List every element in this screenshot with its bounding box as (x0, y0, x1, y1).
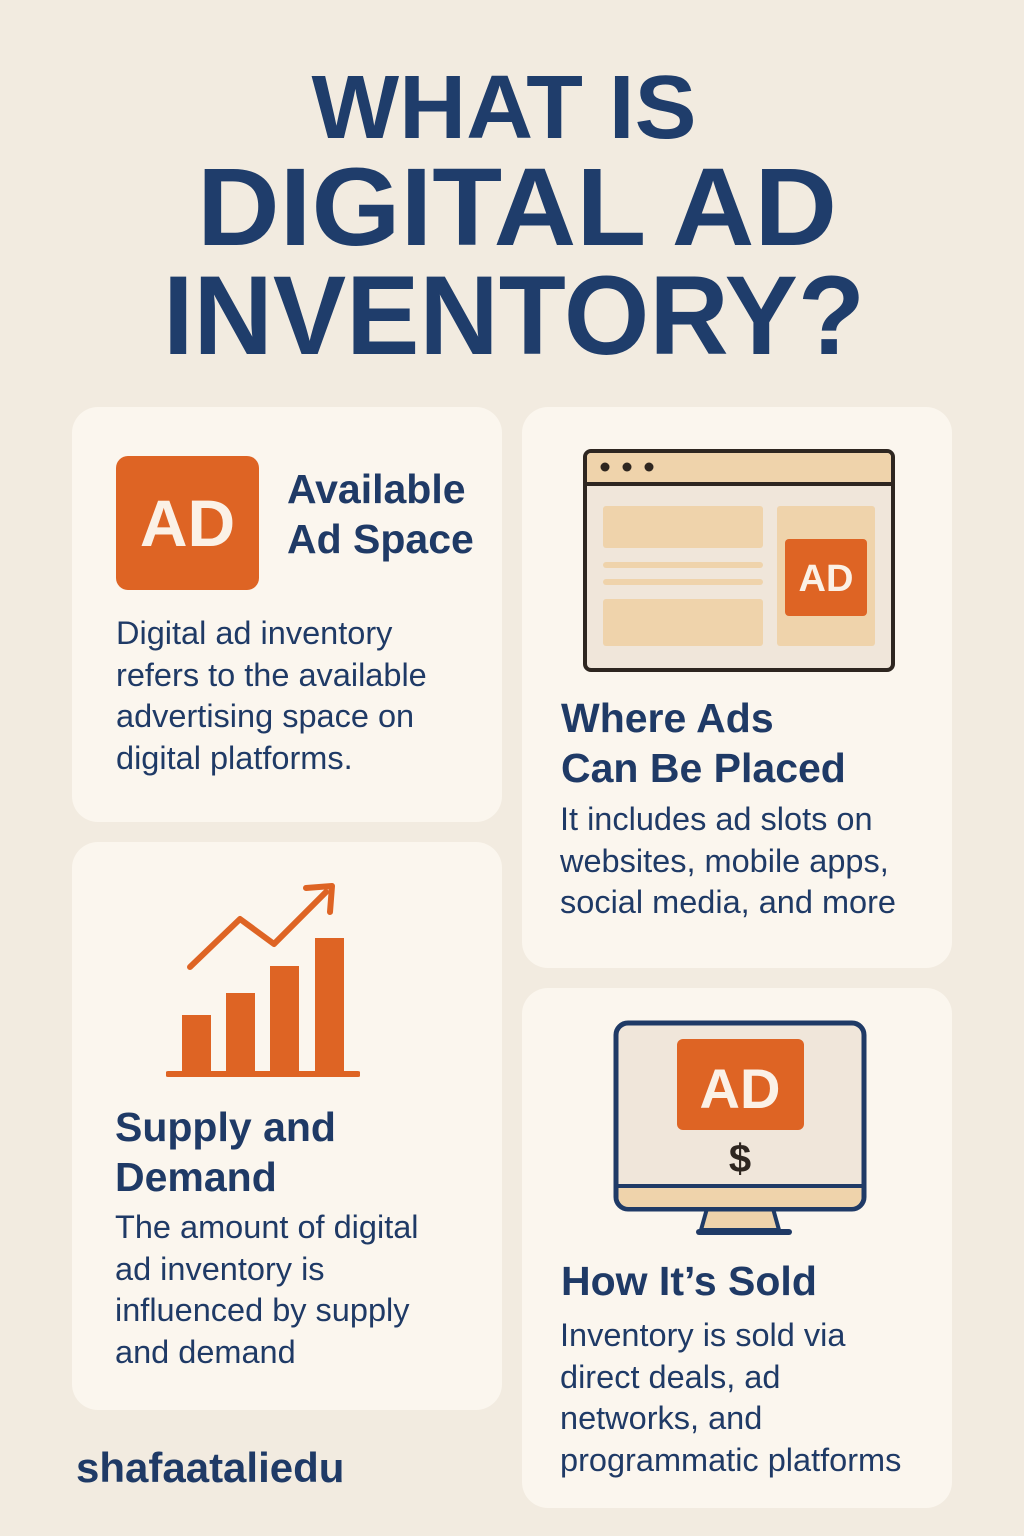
heading: supply and demand: Supply and (115, 1104, 336, 1150)
icon: browser (583, 449, 895, 672)
text: supply demand (115, 1209, 419, 1370)
panel: available ad space (72, 407, 502, 822)
text: selling: programmatic platforms (560, 1442, 901, 1478)
heading: available ad space: Ad Space (287, 516, 474, 562)
heading: supply and demand (115, 1104, 336, 1200)
footer: brand: shafaataliedu (76, 1444, 344, 1491)
heading: how it's sold: How It’s Sold (561, 1258, 817, 1304)
text: supply demand: ad inventory is (115, 1250, 325, 1286)
text: definition (116, 615, 427, 776)
icon: AD box (116, 456, 259, 590)
panel: supply and demand (72, 842, 502, 1410)
icon: browser: AD (799, 558, 853, 600)
heading: where ads can be placed: Where Ads (561, 695, 774, 741)
heading: where ads can be placed: Can Be Placed (561, 745, 846, 791)
heading: available ad space: Available (287, 466, 466, 512)
text: placement: social media, and more (560, 884, 896, 920)
text: definition: digital platforms. (116, 740, 353, 776)
icon: monitor with ad and dollar (614, 1020, 866, 1235)
panel: how it's sold (522, 988, 952, 1508)
text: selling: networks, and (560, 1400, 762, 1436)
icon: bar chart with arrow (166, 883, 360, 1077)
icon: monitor with ad and dollar: $ (729, 1137, 751, 1181)
heading: available ad space (287, 466, 474, 562)
text: placement: It includes ad slots on (560, 801, 873, 837)
text: supply demand: The amount of digital (115, 1209, 419, 1245)
text: selling (560, 1317, 901, 1478)
heading: where ads can be placed (561, 695, 846, 791)
icon: AD box: AD (140, 486, 235, 560)
text: selling: direct deals, ad (560, 1358, 780, 1394)
text: supply demand: influenced by supply (115, 1292, 410, 1328)
title (163, 58, 865, 370)
panel: where ads can be placed (522, 407, 952, 968)
icon: monitor with ad and dollar: AD (700, 1057, 780, 1120)
heading: supply and demand: Demand (115, 1154, 277, 1200)
text: definition: refers to the available (116, 656, 427, 692)
text: definition: advertising space on (116, 698, 414, 734)
text: definition: Digital ad inventory (116, 615, 392, 651)
text: placement: websites, mobile apps, (560, 842, 889, 878)
text: supply demand: and demand (115, 1334, 296, 1370)
title: DIGITAL AD (197, 146, 837, 269)
text: selling: Inventory is sold via (560, 1317, 845, 1353)
text: placement (560, 801, 896, 920)
title: WHAT IS (312, 58, 696, 158)
